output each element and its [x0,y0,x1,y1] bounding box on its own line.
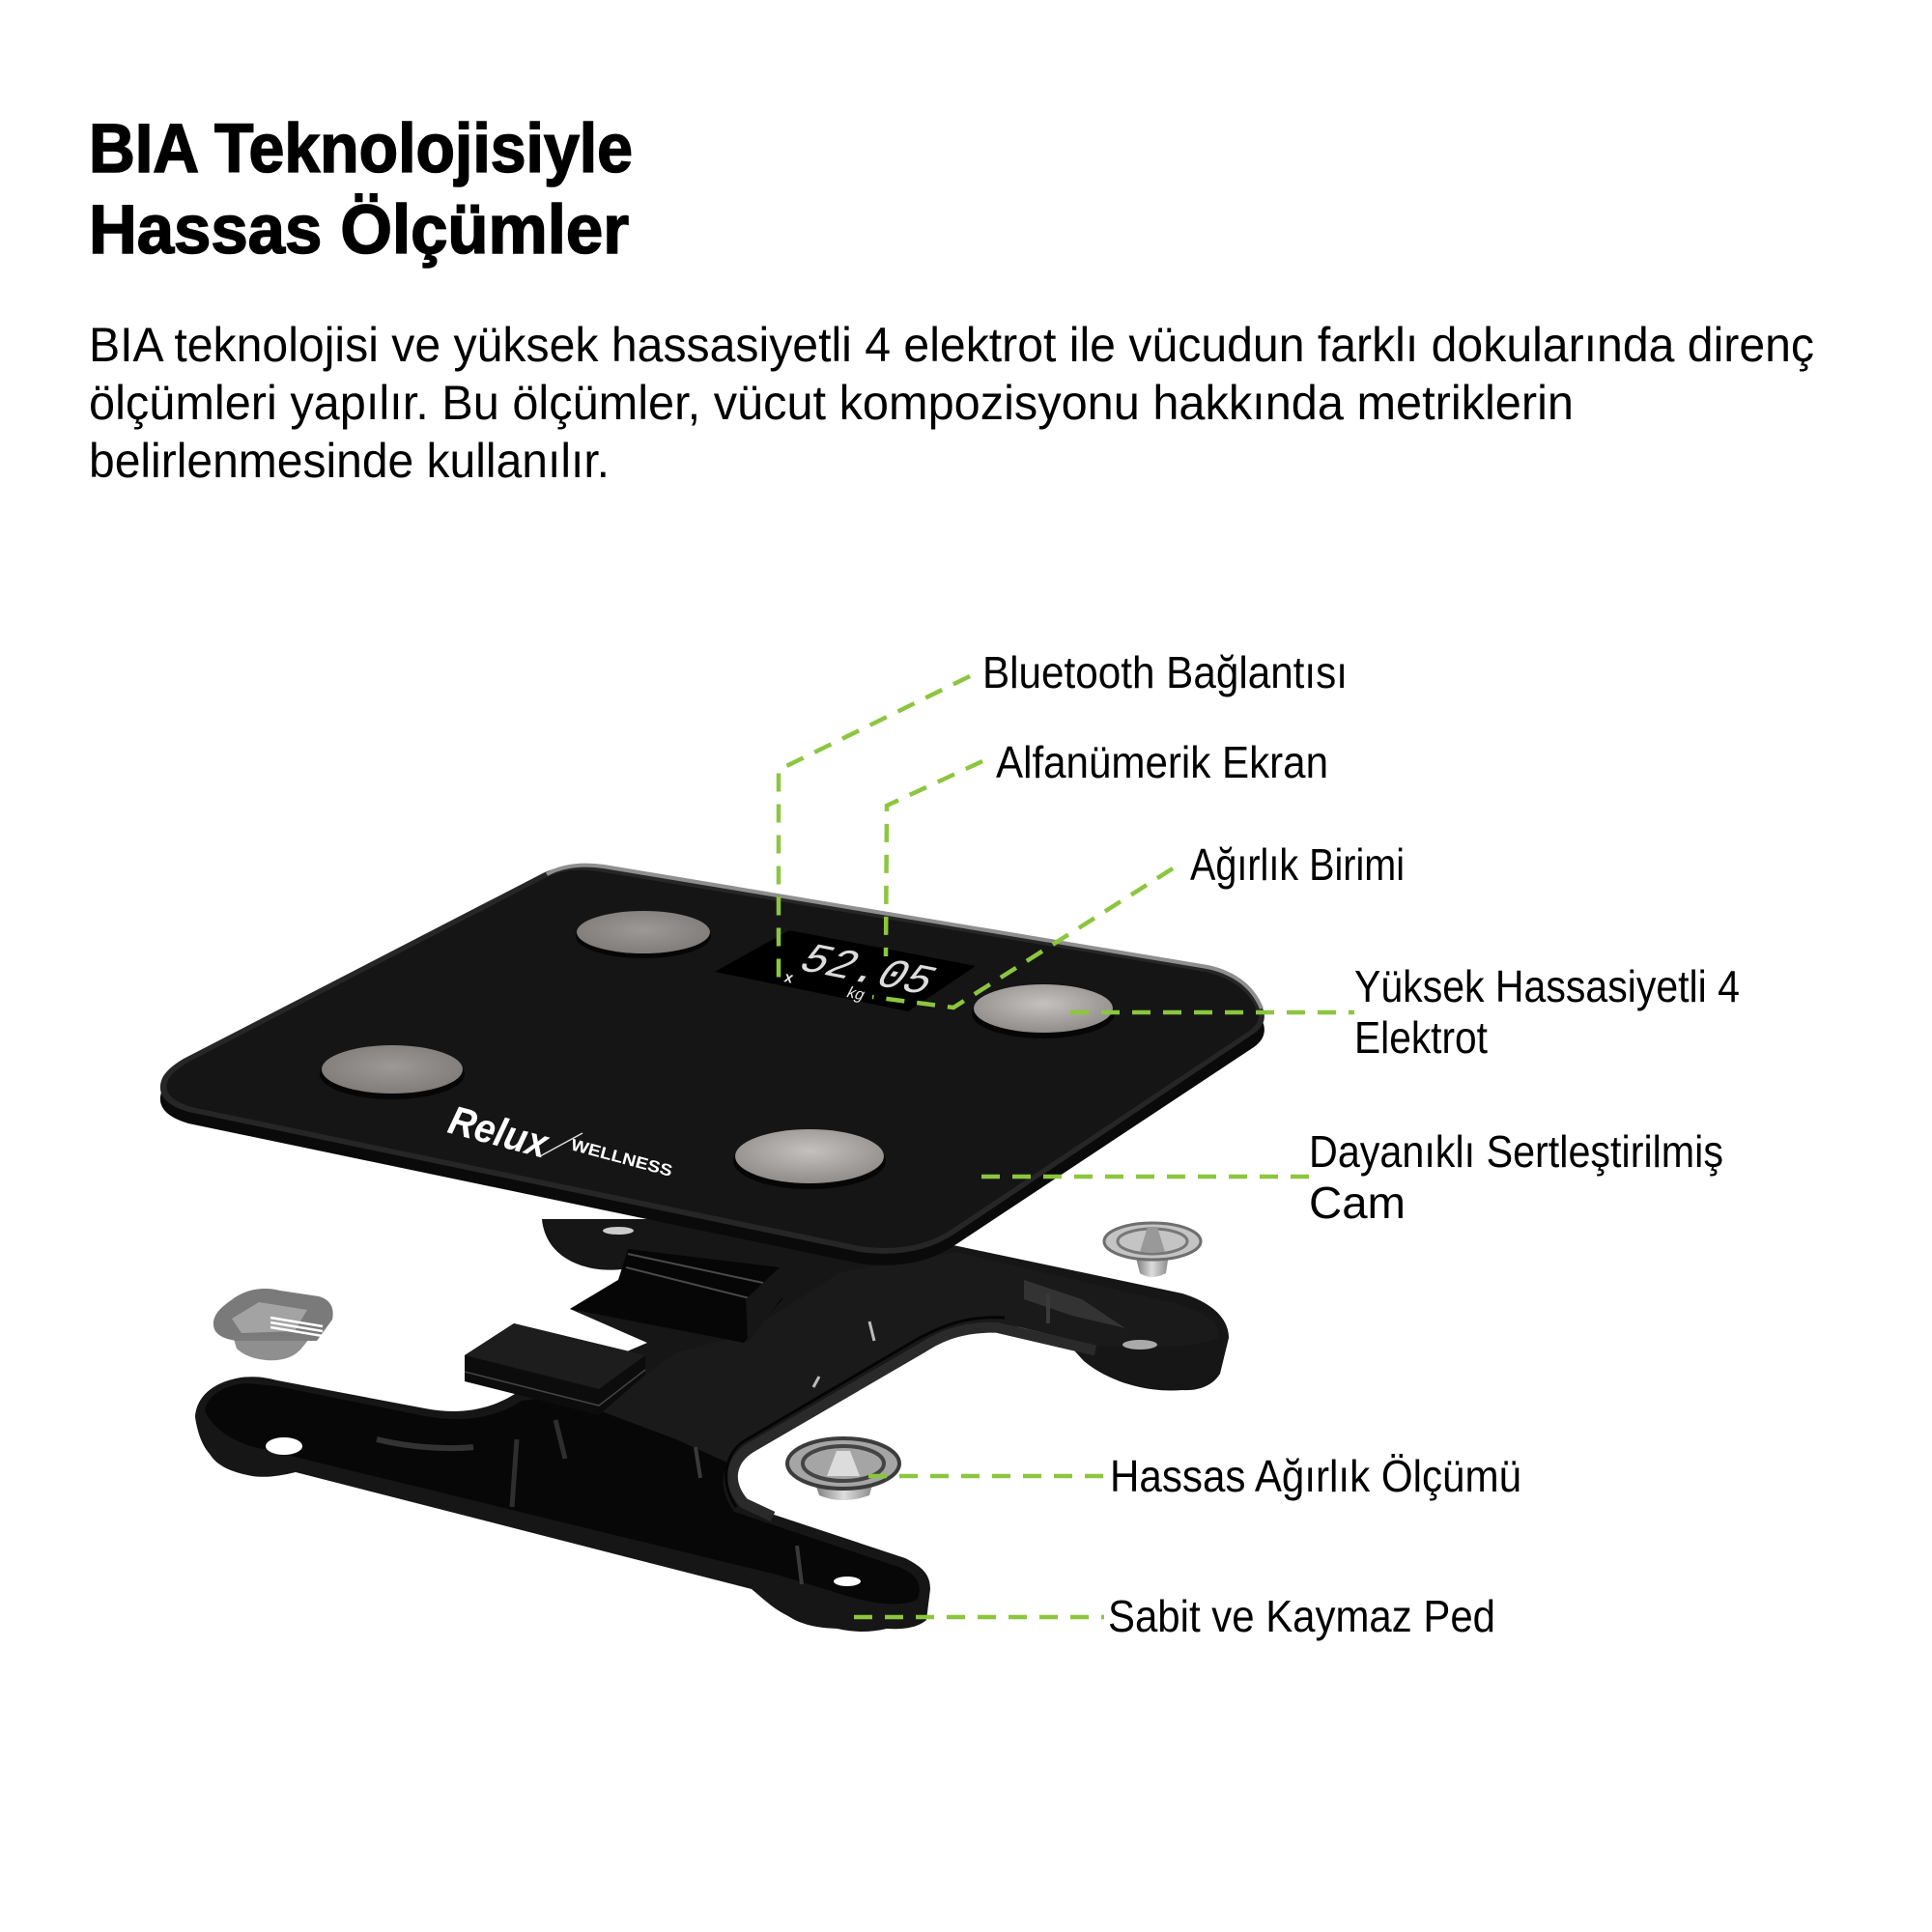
leader line: weight unit [872,868,1173,1008]
rear rail gloss [1024,1280,1125,1328]
rear left foot highlight [603,1227,634,1235]
title: BIA Teknolojisiyle [89,111,633,187]
label: pad: Sabit ve Kaymaz Ped [1108,1591,1495,1641]
plate rim [160,866,1264,1254]
exploded base frame [195,1219,1229,1632]
inner rim curve [732,1327,1095,1517]
top edge highlight [547,866,1262,1009]
intro paragraph: ölçümleri yapılır. Bu ölçümler, vücut kompozisyonu hakkında metriklerin [89,376,1574,430]
intro paragraph: belirlenmesinde kullanılır. [89,434,610,488]
leader line: pad [854,1615,1104,1619]
scale glass plate [160,866,1264,1265]
inner rim shadow [726,1318,1005,1507]
intro paragraph [89,318,1814,488]
leader line: bluetooth [779,676,970,978]
sensor: left square [213,1289,333,1360]
display panel [715,930,976,1011]
label: bluetooth: Bluetooth Bağlantısı [982,647,1348,697]
label: electrodes: Yüksek Hassasiyetli 4 [1354,961,1740,1011]
foot hole right [834,1577,861,1586]
electrode bottom left [320,1049,465,1099]
label: electrodes [1354,961,1740,1063]
title [89,111,633,269]
label: glass [1309,1126,1723,1228]
label: display: Alfanümerik Ekran [996,737,1328,787]
foot hole left [266,1437,302,1455]
sensor: rear right [1104,1223,1201,1277]
frame silhouette [195,1219,1229,1632]
electrode top left [576,914,711,958]
plate shadow edge [160,879,1264,1265]
logo divider [540,1133,582,1156]
leader line: electrodes [1070,1010,1354,1014]
floor of front rail [205,1383,920,1604]
brand wellness: WELLNESS [569,1136,674,1180]
display unit: kg [845,983,867,1004]
front rail gloss [377,1439,473,1448]
brand logo: Relux [444,1096,554,1167]
small white glint centre [813,1321,874,1387]
intro paragraph: BIA teknolojisi ve yüksek hassasiyetli 4 elektrot ile vücudun farklı dokularında direnç [89,318,1814,372]
rib glint left [512,1420,565,1507]
rib glint right [696,1294,1048,1584]
bluetooth icon: x [782,969,796,987]
label: glass: Cam [1309,1178,1406,1228]
display reading: 52.05 [787,937,946,1007]
control box [465,1323,645,1415]
floor of centre and rear rail [599,1252,1219,1463]
plate face [166,870,1259,1248]
label: electrodes: Elektrot [1354,1012,1488,1063]
label: glass: Dayanıklı Sertleştirilmiş [1309,1126,1723,1177]
electrode bottom right [733,1133,886,1189]
title: Hassas Ölçümler [89,192,629,269]
battery compartment [570,1249,784,1343]
label: weight sensor: Hassas Ağırlık Ölçümü [1110,1451,1521,1501]
label: weight unit: Ağırlık Birimi [1190,839,1405,890]
electrode top right [972,988,1115,1038]
leader line: display [886,761,982,956]
rear foot highlight [1122,1340,1157,1350]
sensor: front [787,1438,899,1500]
leader line: weight sensor [868,1474,1104,1478]
leader line: glass [981,1175,1312,1179]
